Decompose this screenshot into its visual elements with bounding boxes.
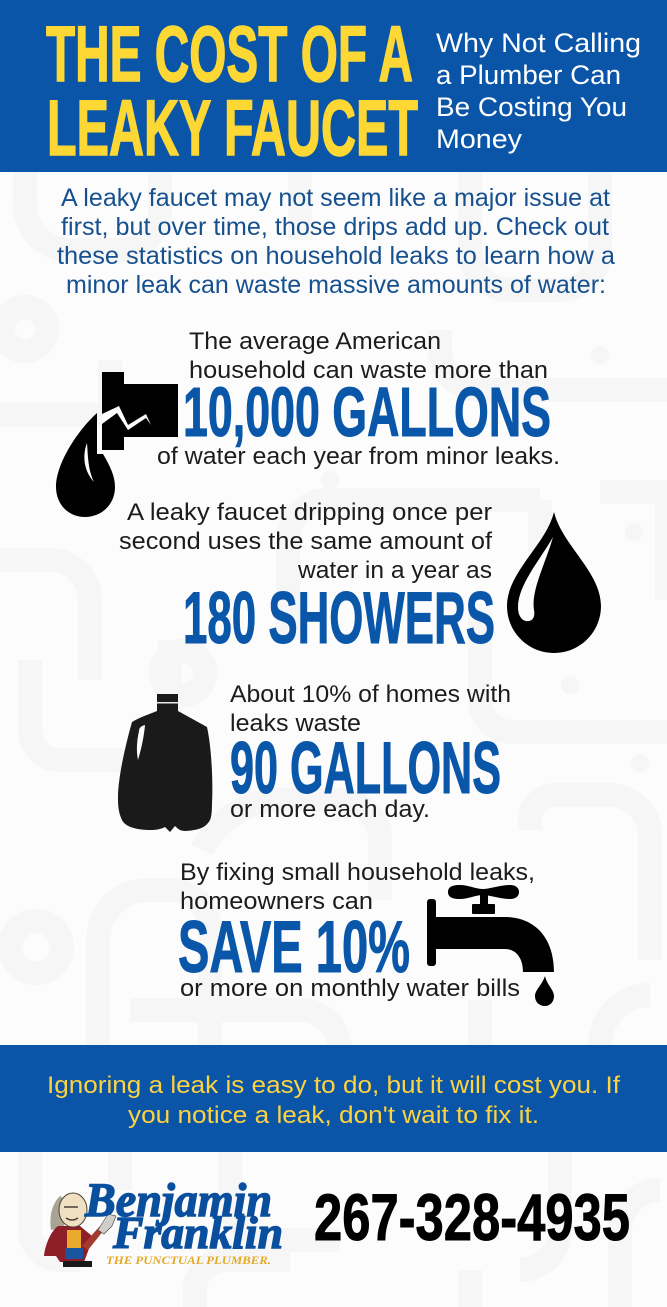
stat 1: household can waste more than xyxy=(189,357,548,384)
stat 3: About 10% of homes with xyxy=(230,681,511,708)
stat 4: or more on monthly water bills xyxy=(180,975,520,1002)
title: THE COST OF A xyxy=(46,9,413,98)
subtitle: a Plumber Can xyxy=(436,60,621,90)
intro text: minor leak can waste massive amounts of water: xyxy=(66,271,606,299)
stat 1 xyxy=(157,328,560,470)
title xyxy=(46,9,418,172)
intro text xyxy=(57,184,615,299)
intro text: these statistics on household leaks to learn how a xyxy=(57,242,615,270)
subtitle xyxy=(436,28,641,154)
stat 1: The average American xyxy=(189,328,441,355)
stat 4: SAVE 10% xyxy=(178,907,410,988)
icon: Ben Franklin mascot xyxy=(44,1193,116,1267)
subtitle: Be Costing You xyxy=(436,92,627,122)
stat 2: second uses the same amount of xyxy=(119,528,492,555)
stat 3 xyxy=(230,681,511,823)
logo: Benjamin Franklin xyxy=(44,1174,283,1267)
icon: water drop xyxy=(507,512,601,653)
title: LEAKY FAUCET xyxy=(47,83,418,172)
intro text: first, but over time, those drips add up. Check out xyxy=(61,213,609,241)
stat 4 xyxy=(178,859,535,1002)
stat 2 xyxy=(119,499,495,659)
footer call-out band: Ignoring a leak is easy to do, but it will cost you. If xyxy=(47,1072,620,1099)
stat 4: By fixing small household leaks, xyxy=(180,859,535,886)
subtitle: Why Not Calling xyxy=(436,28,641,58)
stat 1: of water each year from minor leaks. xyxy=(157,443,560,470)
stat 3: leaks waste xyxy=(230,710,361,737)
stat 2: A leaky faucet dripping once per xyxy=(127,499,492,526)
stat 3: or more each day. xyxy=(230,796,430,823)
stat 2: water in a year as xyxy=(297,557,492,584)
icon: broken pipe with drop xyxy=(56,372,178,517)
footer call-out band xyxy=(0,1045,667,1152)
logo: Benjamin Franklin: Franklin xyxy=(112,1208,283,1258)
stat 4: homeowners can xyxy=(180,888,373,915)
icon: dripping tap xyxy=(427,885,554,1006)
logo: Benjamin Franklin: Benjamin xyxy=(84,1174,272,1227)
intro text: A leaky faucet may not seem like a major issue at xyxy=(61,184,610,212)
logo: Benjamin Franklin: THE PUNCTUAL PLUMBER. xyxy=(106,1253,271,1267)
icon: gallon jug xyxy=(118,694,212,832)
header band xyxy=(0,0,667,172)
footer call-out band: you notice a leak, don't wait to fix it. xyxy=(128,1102,539,1129)
subtitle: Money xyxy=(436,124,523,154)
